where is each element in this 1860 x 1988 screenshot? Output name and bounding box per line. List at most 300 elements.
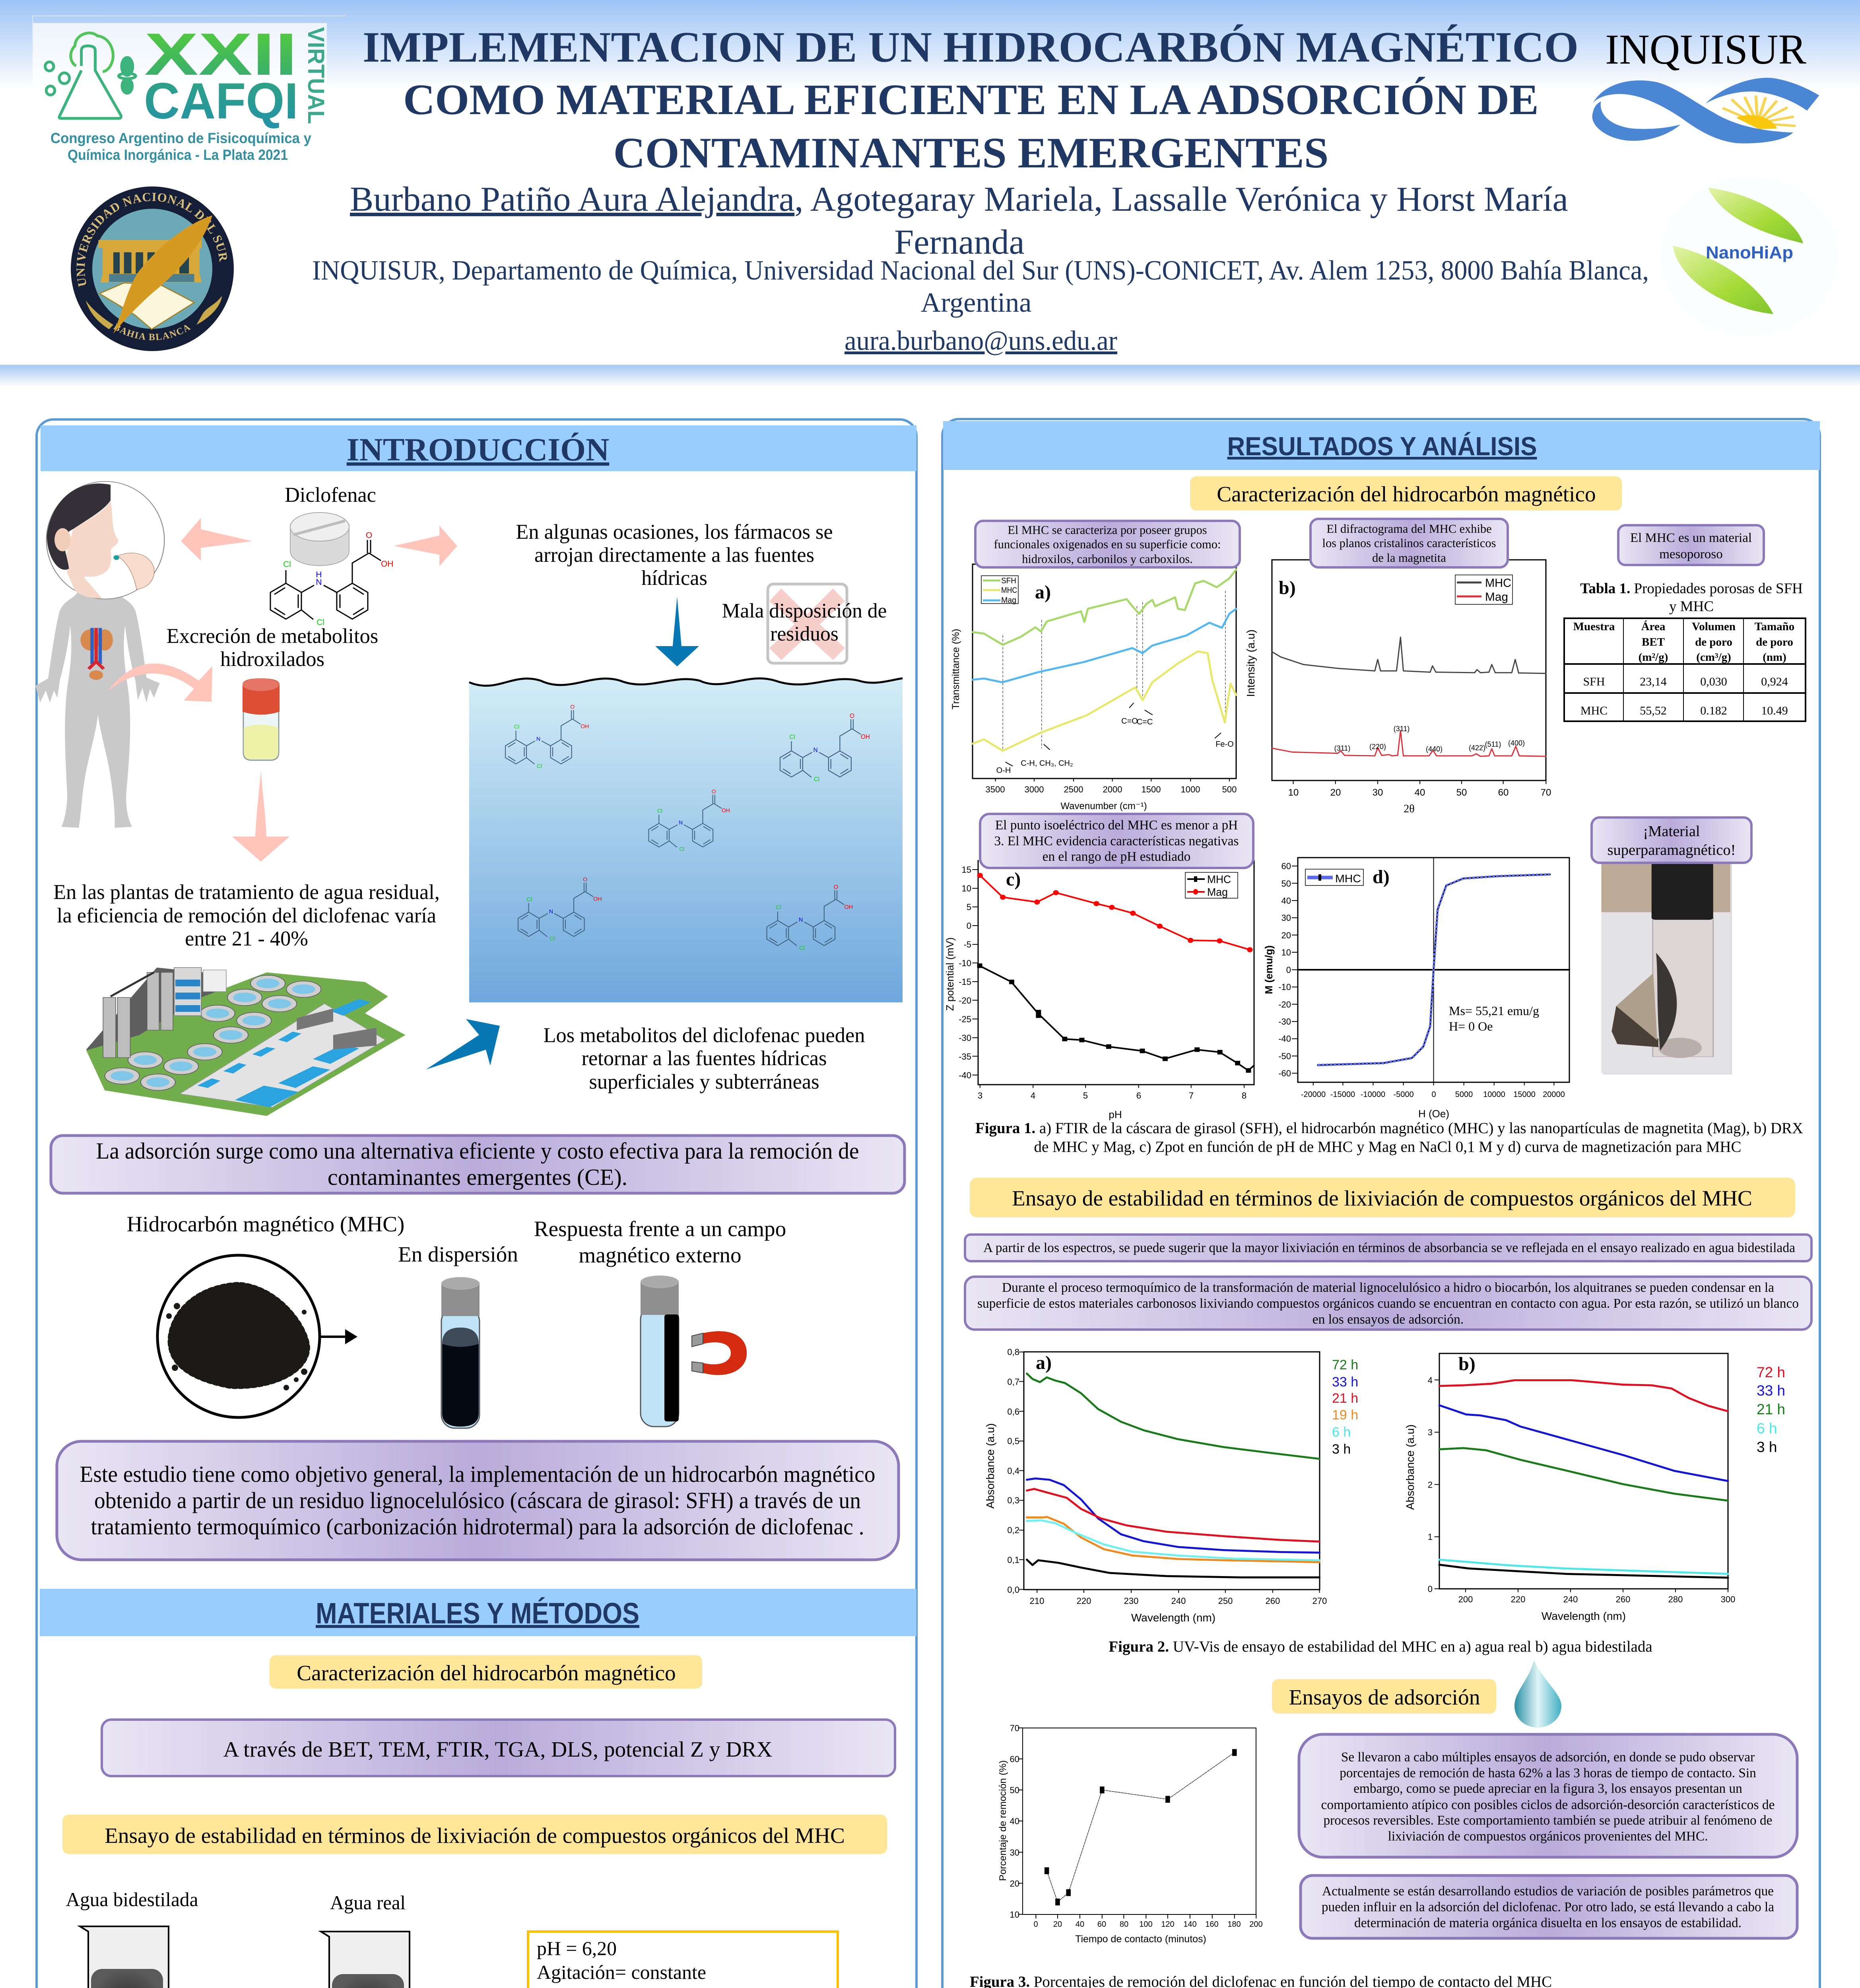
labels: intro text: En algunas ocasiones, los fármacos se <box>516 520 833 544</box>
label: ensayo de estabilidad: Ensayo de estabilidad en términos de lixiviación de compuestos orgánicos del MHC <box>1012 1186 1752 1210</box>
callout: técnicas: A través de BET, TEM, FTIR, TGA, DLS, potencial Z y DRX <box>223 1738 773 1762</box>
chart: UV-Vis agua bidestilada: 0 <box>1428 1584 1433 1594</box>
callout: estudios en desarrollo: Actualmente se están desarrollando estudios de variación de posibles parámetros que <box>1322 1884 1774 1899</box>
callout: técnicas <box>102 1720 895 1776</box>
chart: FTIR: Wavenumber (cm⁻¹) <box>1060 801 1147 812</box>
chart: magnetization curve: 60 <box>1281 861 1291 871</box>
chart: DRX: 10 <box>1288 787 1299 798</box>
chart: Z potential: -30 <box>959 1033 971 1043</box>
chart: UV-Vis agua real: 230 <box>1124 1596 1138 1606</box>
table: propiedades porosas: 0,030 <box>1700 675 1727 688</box>
callout: DRX: de la magnetita <box>1372 551 1446 565</box>
chart: magnetization curve: -15000 <box>1330 1090 1355 1099</box>
legend: DRX: Mag <box>1485 590 1508 604</box>
legend: UV-Vis agua bidestilada: 72 h <box>1757 1364 1785 1380</box>
labels: MHC figure: Hidrocarbón magnético (MHC) <box>127 1212 404 1236</box>
chart: UV-Vis agua bidestilada: Absorbance (a.u) <box>1404 1425 1416 1510</box>
label: caracterización: Caracterización del hidrocarbón magnético <box>297 1661 676 1685</box>
box: condiciones estabilidad: Agitación= constante <box>537 1961 706 1983</box>
logo: Universidad Nacional del Sur seal <box>71 186 234 351</box>
table: propiedades porosas: Volumen <box>1692 620 1736 633</box>
chart: DRX: (400) <box>1508 739 1525 747</box>
chart: magnetization curve: H (Oe) <box>1418 1108 1449 1120</box>
chart: Z potential: -10 <box>959 958 971 968</box>
chart: FTIR: 3000 <box>1025 784 1044 794</box>
chart: magnetization curve: 50 <box>1281 879 1291 889</box>
chart: DRX <box>1245 560 1551 815</box>
callout: objetivo: obtenido a partir de un residuo lignocelulósico (cáscara de girasol: SFH) a través de un <box>94 1487 861 1513</box>
illustration: wastewater treatment plant <box>86 967 406 1116</box>
chart: magnetization curve: -60 <box>1278 1068 1291 1078</box>
molecule in water 2 <box>780 712 870 783</box>
label: ensayo de estabilidad: Ensayo de estabilidad en términos de lixiviación de compuestos orgánicos del MHC <box>105 1823 845 1848</box>
molecule in water 1 <box>505 704 589 770</box>
label: caracterización: Caracterización del hidrocarbón magnético <box>1217 482 1596 506</box>
chart: FTIR: C-H, CH₃, CH₂ <box>1021 759 1073 768</box>
icon: crossed-out waste disposal: residuos <box>770 623 839 645</box>
labels: intro text: superficiales y subterráneas <box>589 1070 819 1093</box>
legend: UV-Vis agua bidestilada: 6 h <box>1757 1420 1777 1437</box>
chart: FTIR: a) <box>1035 582 1051 603</box>
label: agua real: Agua real <box>330 1891 406 1914</box>
chart: DRX: (511) <box>1485 740 1501 748</box>
molecule in water 4: Cl <box>527 896 532 903</box>
chart: magnetization curve: 20 <box>1281 930 1291 940</box>
molecule in water 1: O <box>570 704 575 711</box>
heading bar: resultados y análisis <box>943 421 1820 470</box>
chart: Z potential: -20 <box>959 996 971 1006</box>
legend: UV-Vis agua real: 72 h <box>1332 1357 1358 1373</box>
chart: DRX: 60 <box>1498 787 1509 798</box>
chart: Z potential: Z potential (mV) <box>944 938 956 1011</box>
table: propiedades porosas: de poro <box>1695 636 1732 648</box>
callout: ensayos de adsorción texto: comportamiento atípico con posibles ciclos de adsorción-desorción característicos de <box>1321 1798 1775 1812</box>
molecule in water 5: OH <box>844 904 853 911</box>
chart: magnetization curve: 20000 <box>1543 1090 1565 1099</box>
molecule in water 1: Cl <box>514 724 519 730</box>
chart: UV-Vis agua real: a) <box>1036 1352 1052 1373</box>
icon: pill <box>290 513 349 565</box>
chart: remoción vs tiempo: 80 <box>1120 1920 1128 1929</box>
box: condiciones estabilidad <box>528 1932 838 1988</box>
chart: UV-Vis agua real: 260 <box>1266 1596 1280 1606</box>
labels: intro text: Diclofenac <box>285 483 376 507</box>
chart: remoción vs tiempo: 30 <box>1010 1848 1019 1858</box>
title: COMO MATERIAL EFICIENTE EN LA ADSORCIÓN DE <box>403 76 1539 124</box>
chart: remoción vs tiempo: Porcentaje de remoción (%) <box>998 1760 1008 1881</box>
chart: Z potential: 10 <box>962 883 971 893</box>
table: propiedades porosas: 0,924 <box>1761 675 1788 688</box>
icon: urine vial <box>243 678 280 760</box>
table: propiedades porosas: (cm³/g) <box>1696 651 1731 664</box>
chart: FTIR: C=C <box>1137 718 1153 726</box>
labels: intro text: retornar a las fuentes hídricas <box>582 1047 827 1070</box>
table: propiedades porosas: y MHC <box>1669 598 1714 615</box>
panel: right column <box>941 419 1820 1988</box>
molecule in water 5: O <box>833 884 838 890</box>
logo: CAFQI: VIRTUAL <box>303 27 329 124</box>
table: propiedades porosas: BET <box>1642 636 1665 648</box>
molecule in water 4 <box>518 877 602 942</box>
molecule in water 2: Cl <box>789 734 795 741</box>
chart: FTIR: 1500 <box>1142 784 1161 794</box>
icon: human body and head <box>35 481 164 828</box>
labels: intro text: hídricas <box>641 567 707 590</box>
molecule in water 2: N <box>813 747 818 753</box>
legend: UV-Vis agua real <box>1332 1357 1358 1457</box>
callout: ensayos de adsorción texto: Se llevaron a cabo múltiples ensayos de adsorción, en donde se pudo observar <box>1341 1750 1755 1765</box>
box: condiciones estabilidad: pH = 6,20 <box>537 1937 617 1959</box>
legend: UV-Vis agua real: 21 h <box>1332 1391 1358 1406</box>
table: propiedades porosas: Área <box>1641 620 1666 633</box>
icon: MHC powder <box>157 1255 357 1417</box>
panel: left column <box>35 419 916 1988</box>
chart: magnetization curve: -10 <box>1278 982 1291 992</box>
chart: magnetization curve: -50 <box>1278 1051 1291 1061</box>
icon: crossed-out waste disposal: Mala disposición de <box>722 600 887 622</box>
chart: FTIR: Transmittance (%) <box>950 629 961 710</box>
legend: UV-Vis agua bidestilada: 33 h <box>1757 1382 1785 1399</box>
chart: DRX: (422) <box>1469 744 1485 752</box>
labels: intro text: hidroxilados <box>220 648 324 671</box>
chart: magnetization curve: -5000 <box>1393 1090 1414 1099</box>
legend: FTIR: Mag <box>1001 596 1016 605</box>
callout: ensayos de adsorción texto: lixiviación de compuestos orgánicos provenientes del MHC. <box>1388 1829 1708 1844</box>
authors <box>350 180 1568 262</box>
chart: DRX: 40 <box>1415 787 1425 798</box>
chart: Z potential: -35 <box>959 1052 971 1062</box>
chart: magnetization curve: -20000 <box>1301 1090 1326 1099</box>
callout: espectros: A partir de los espectros, se puede sugerir que la mayor lixiviación en términos de absorbancia se ve reflejada en el ensayo realizado en agua bidestilada <box>983 1241 1795 1255</box>
chart: DRX: 50 <box>1456 787 1467 798</box>
label: caracterización <box>270 1655 702 1689</box>
chart: DRX: (311) <box>1394 725 1410 733</box>
chart: magnetization curve: d) <box>1373 866 1390 887</box>
chart: remoción vs tiempo: 40 <box>1010 1816 1019 1826</box>
chart: Z potential: 3 <box>978 1091 982 1101</box>
callout: ensayos de adsorción texto: procesos reversibles. Este comportamiento también se puede atribuir al fenómeno de <box>1324 1813 1772 1828</box>
logo: CAFQI: Química Inorgánica - La Plata 2021 <box>68 147 288 163</box>
callout: mesoporoso <box>1618 525 1764 565</box>
callout: objetivo: Este estudio tiene como objetivo general, la implementación de un hidrocarbón magnético <box>80 1461 876 1487</box>
logo: CAFQI <box>33 16 346 166</box>
callout: FTIR: hidroxilos, carbonilos y carboxilos. <box>1022 552 1193 566</box>
caption: figura 1 <box>975 1120 1803 1155</box>
chart: FTIR: 500 <box>1222 784 1237 794</box>
callout: ensayos de adsorción texto: porcentajes de remoción de hasta 62% a las 3 horas de tiempo de contacto. Sin <box>1340 1766 1756 1780</box>
labels: intro text: entre 21 - 40% <box>185 927 308 950</box>
chart: remoción vs tiempo: 40 <box>1076 1920 1084 1929</box>
callout: FTIR: funcionales oxigenados en su superficie como: <box>994 538 1221 551</box>
chart: UV-Vis agua bidestilada: 300 <box>1721 1594 1735 1604</box>
molecule in water 4: O <box>583 877 587 883</box>
chart: FTIR: 2500 <box>1064 784 1083 794</box>
callout: ensayos de adsorción texto <box>1299 1734 1797 1857</box>
legend: UV-Vis agua real: 3 h <box>1332 1442 1351 1457</box>
chart: DRX: 2θ <box>1404 803 1415 815</box>
callout: estudios en desarrollo: determinación de materia orgánica disuelta en los ensayos de estabilidad. <box>1354 1916 1742 1930</box>
affiliation: INQUISUR, Departamento de Química, Universidad Nacional del Sur (UNS)-CONICET, Av. Alem 1253, 8000 Bahía Blanca, <box>312 255 1649 286</box>
molecule in water 4: Cl <box>549 936 555 942</box>
callout: estudios en desarrollo: pueden influir en la adsorción del diclofenac. Por otro lado, se está llevando a cabo la <box>1322 1900 1774 1914</box>
callout: objetivo: tratamiento termoquímico (carbonización hidrotermal) para la adsorción de diclofenac . <box>91 1514 864 1540</box>
chart: UV-Vis agua bidestilada: Wavelength (nm) <box>1542 1610 1626 1622</box>
labels: MHC figure: En dispersión <box>398 1242 518 1266</box>
label: ensayos de adsorción <box>1272 1679 1496 1714</box>
chart: magnetization curve: -40 <box>1278 1034 1291 1044</box>
chart: UV-Vis agua bidestilada: 1 <box>1428 1532 1433 1542</box>
legend: magnetization: MHC <box>1335 872 1361 885</box>
heading bar: introducción <box>41 425 916 471</box>
table: propiedades porosas: (m²/g) <box>1639 651 1668 664</box>
chart: magnetization curve: 0 <box>1431 1090 1436 1099</box>
label: ensayo de estabilidad <box>970 1178 1795 1217</box>
chart: UV-Vis agua real: 0,3 <box>1007 1495 1019 1505</box>
photo: vial with magnet <box>1601 863 1732 1074</box>
molecule in water 3: N <box>679 819 683 826</box>
chart: UV-Vis agua bidestilada: 3 <box>1428 1427 1433 1437</box>
chart: UV-Vis agua real: 0,7 <box>1007 1377 1019 1387</box>
chart: UV-Vis agua real: 0,1 <box>1007 1555 1019 1565</box>
legend: DRX <box>1455 575 1512 604</box>
chart: remoción vs tiempo: 160 <box>1205 1920 1219 1929</box>
arrow: blue diagonal <box>426 1019 500 1070</box>
chart: UV-Vis agua real: 270 <box>1312 1596 1327 1606</box>
callout: adsorción: contaminantes emergentes (CE). <box>328 1164 627 1190</box>
chart: magnetization curve: -20 <box>1278 1000 1291 1010</box>
molecule in water 5 <box>767 884 853 951</box>
molecule: diclofenac: O <box>366 531 372 540</box>
table: propiedades porosas: Tamaño <box>1755 620 1794 633</box>
caption: figura 2: Figura 2. UV-Vis de ensayo de estabilidad del MHC en a) agua real b) agua bidestilada <box>1109 1638 1652 1655</box>
chart: Z potential: -40 <box>959 1070 971 1080</box>
molecule in water 2: Cl <box>814 776 819 783</box>
chart: Z potential: -15 <box>959 977 971 987</box>
chart: UV-Vis agua bidestilada: 240 <box>1563 1594 1578 1604</box>
callout: DRX: los planos cristalinos característicos <box>1322 536 1496 550</box>
chart: magnetization curve: Ms= 55,21 emu/g <box>1449 1004 1539 1018</box>
chart: magnetization curve <box>1263 858 1569 1120</box>
chart: UV-Vis agua bidestilada: 220 <box>1511 1594 1525 1604</box>
molecule in water 2: OH <box>861 734 870 740</box>
chart: DRX: (440) <box>1426 745 1443 753</box>
table: propiedades porosas: Tabla 1. Propiedades porosas de SFH <box>1580 580 1803 597</box>
legend: UV-Vis agua bidestilada <box>1757 1364 1785 1455</box>
chart: FTIR <box>950 564 1237 812</box>
chart: FTIR: C=O <box>1121 717 1138 726</box>
authors: Burbano Patiño Aura Alejandra, Agotegaray Mariela, Lassalle Verónica y Horst María <box>350 180 1568 219</box>
legend: FTIR: MHC <box>1001 586 1017 595</box>
logo: CAFQI: XXII <box>144 21 297 87</box>
chart: UV-Vis agua real: 0,4 <box>1007 1466 1019 1476</box>
callout: adsorción: La adsorción surge como una alternativa eficiente y costo efectiva para la remoción de <box>96 1138 859 1164</box>
callout: DRX: El difractograma del MHC exhibe <box>1326 522 1492 536</box>
callout: FTIR: El MHC se caracteriza por poseer grupos <box>1008 523 1207 537</box>
illustration: water body with diclofenac <box>469 678 903 1002</box>
legend: FTIR <box>981 576 1018 605</box>
icon: stirrer agua real <box>307 1932 525 1988</box>
chart: UV-Vis agua real: Wavelength (nm) <box>1131 1611 1215 1624</box>
chart: remoción vs tiempo: 60 <box>1010 1754 1019 1764</box>
icon: stirrer agua bidestilada <box>66 1926 284 1988</box>
chart: remoción vs tiempo: 140 <box>1183 1920 1197 1929</box>
labels: MHC figure: Respuesta frente a un campo <box>534 1217 786 1241</box>
heading bar: materiales y métodos: MATERIALES Y MÉTODOS <box>316 1597 639 1630</box>
callout: adsorción <box>51 1136 905 1193</box>
chart: UV-Vis agua bidestilada: 4 <box>1428 1375 1433 1385</box>
chart: Z potential: c) <box>1006 869 1021 890</box>
table: propiedades porosas: 0.182 <box>1700 704 1727 717</box>
chart: FTIR: O-H <box>996 766 1011 775</box>
molecule: diclofenac: N <box>316 578 322 587</box>
callout: proceso termoquímico: superficie de estos materiales carbonosos lixiviando compuestos orgánicos cuando se encuentran en contacto con agua. Por esta razón, se utilizó un blanco <box>977 1296 1799 1311</box>
heading bar: materiales y métodos <box>40 1589 916 1636</box>
callout: FTIR <box>975 521 1240 567</box>
chart: Z potential: 5 <box>1083 1091 1088 1101</box>
authors: Fernanda <box>894 223 1025 262</box>
molecule: diclofenac: OH <box>381 559 394 569</box>
legend: magnetization <box>1305 869 1363 885</box>
callout: superparamagnético <box>1592 817 1751 863</box>
callout: superparamagnético: superparamagnético! <box>1608 842 1736 858</box>
logo: Universidad Nacional del Sur seal: UNIVERSIDAD NACIONAL DEL SUR <box>74 190 231 288</box>
table: propiedades porosas: 23,14 <box>1640 675 1667 688</box>
callout: punto isoeléctrico: El punto isoeléctrico del MHC es menor a pH <box>995 818 1238 833</box>
labels: intro text: la eficiencia de remoción del diclofenac varía <box>57 904 436 927</box>
chart: UV-Vis agua bidestilada <box>1404 1353 1785 1622</box>
title: IMPLEMENTACION DE UN HIDROCARBÓN MAGNÉTICO <box>363 23 1578 71</box>
legend: Z potential <box>1185 872 1238 898</box>
callout: punto isoeléctrico: 3. El MHC evidencia características negativas <box>994 834 1239 848</box>
legend: Z potential: Mag <box>1207 886 1228 898</box>
chart: Z potential: 6 <box>1136 1091 1141 1101</box>
molecule in water 1: OH <box>581 724 589 730</box>
logo: Universidad Nacional del Sur seal: BAHIA BLANCA <box>112 322 193 343</box>
logo: CAFQI: Congreso Argentino de Fisicoquímica y <box>50 130 311 146</box>
chart: DRX: 70 <box>1541 787 1551 798</box>
callout: mesoporoso: El MHC es un material <box>1630 531 1752 545</box>
chart: DRX: b) <box>1279 577 1296 598</box>
chart: remoción vs tiempo: 70 <box>1010 1723 1019 1733</box>
molecule: diclofenac: H <box>316 570 322 579</box>
logo: CAFQI: CAFQI <box>144 73 298 130</box>
callout: superparamagnético: ¡Material <box>1643 823 1700 840</box>
chart: magnetization curve: 0 <box>1286 965 1291 975</box>
icon: tube in dispersion <box>441 1277 480 1428</box>
chart: Z potential: 8 <box>1242 1091 1246 1101</box>
callout: espectros <box>965 1235 1811 1261</box>
chart: Z potential: 0 <box>967 921 971 931</box>
molecule in water 2: O <box>850 712 854 719</box>
heading bar: resultados y análisis: RESULTADOS Y ANÁLISIS <box>1227 431 1537 461</box>
chart: remoción vs tiempo: 10 <box>1010 1910 1019 1920</box>
arrow: pink down from vial <box>232 771 289 862</box>
chart: magnetization curve: 5000 <box>1455 1090 1473 1099</box>
molecule in water 3: Cl <box>679 846 684 852</box>
chart: UV-Vis agua real: 210 <box>1030 1596 1044 1606</box>
chart: Z potential: 7 <box>1189 1091 1194 1101</box>
chart: UV-Vis agua real: Absorbance (a.u) <box>984 1423 996 1508</box>
chart: DRX: 20 <box>1330 787 1341 798</box>
chart: remoción vs tiempo: 20 <box>1010 1879 1019 1889</box>
labels: intro text: arrojan directamente a las fuentes <box>534 544 814 567</box>
table: propiedades porosas: (nm) <box>1763 651 1786 664</box>
chart: magnetization curve: M (emu/g) <box>1263 945 1275 994</box>
chart: UV-Vis agua real: 250 <box>1218 1596 1233 1606</box>
callout: mesoporoso: mesoporoso <box>1659 547 1723 561</box>
title <box>363 23 1578 177</box>
table: propiedades porosas: Muestra <box>1573 620 1615 633</box>
molecule in water 5: Cl <box>776 905 781 911</box>
chart: UV-Vis agua real: 220 <box>1077 1596 1091 1606</box>
callout: punto isoeléctrico: en el rango de pH estudiado <box>1043 849 1190 864</box>
legend: UV-Vis agua real: 6 h <box>1332 1425 1351 1440</box>
chart: magnetization curve: -30 <box>1278 1017 1291 1027</box>
legend: UV-Vis agua bidestilada: 3 h <box>1757 1439 1777 1455</box>
chart: UV-Vis agua real: 240 <box>1171 1596 1186 1606</box>
chart: remoción vs tiempo <box>998 1723 1263 1945</box>
chart: magnetization curve: 10000 <box>1483 1090 1505 1099</box>
email: aura.burbano@uns.edu.ar <box>845 326 1117 356</box>
chart: remoción vs tiempo: 100 <box>1139 1920 1153 1929</box>
chart: magnetization curve: 15000 <box>1513 1090 1536 1099</box>
molecule in water 4: N <box>549 909 553 915</box>
arrow: blue down to water <box>655 596 699 666</box>
icon: water drop <box>1514 1660 1561 1728</box>
labels: MHC figure: magnético externo <box>579 1243 742 1267</box>
chart: UV-Vis agua bidestilada: 2 <box>1428 1480 1433 1490</box>
chart: remoción vs tiempo: 20 <box>1053 1920 1062 1929</box>
molecule: diclofenac <box>270 531 394 627</box>
chart: UV-Vis agua bidestilada: 260 <box>1616 1594 1630 1604</box>
labels: intro text: En las plantas de tratamiento de agua residual, <box>53 881 440 904</box>
table: propiedades porosas: SFH <box>1583 675 1605 688</box>
table: propiedades porosas <box>1564 580 1806 721</box>
chart: Z potential: pH <box>1109 1109 1122 1120</box>
table: propiedades porosas: 55,52 <box>1640 704 1667 717</box>
logo: INQUISUR <box>1592 26 1819 144</box>
chart: UV-Vis agua bidestilada: b) <box>1458 1353 1476 1375</box>
molecule in water 3: OH <box>722 807 730 813</box>
chart: remoción vs tiempo: 120 <box>1161 1920 1175 1929</box>
chart: remoción vs tiempo: 0 <box>1033 1920 1038 1929</box>
chart: DRX: (220) <box>1369 743 1386 751</box>
callout: estudios en desarrollo <box>1301 1875 1797 1938</box>
labels: intro text: Excreción de metabolitos <box>167 625 378 648</box>
chart: FTIR: 2000 <box>1103 784 1122 794</box>
chart: UV-Vis agua real: 0,8 <box>1007 1347 1019 1357</box>
chart: remoción vs tiempo: 180 <box>1227 1920 1241 1929</box>
molecule in water 3: O <box>712 788 716 795</box>
chart: magnetization curve: 30 <box>1281 913 1291 923</box>
chart: DRX: (311) <box>1334 744 1350 752</box>
heading bar: introducción: INTRODUCCIÓN <box>347 431 609 468</box>
chart: UV-Vis agua real: 0,0 <box>1007 1585 1019 1595</box>
logo: NanoHiAp: NanoHiAp <box>1706 243 1793 262</box>
legend: Z potential: MHC <box>1207 873 1231 885</box>
chart: Z potential: 5 <box>967 902 971 912</box>
legend: UV-Vis agua bidestilada: 21 h <box>1757 1401 1785 1417</box>
chart: magnetization curve: H= 0 Oe <box>1449 1019 1493 1033</box>
chart: remoción vs tiempo: 60 <box>1097 1920 1106 1929</box>
chart: FTIR: 1000 <box>1181 784 1200 794</box>
label: ensayo de estabilidad <box>62 1815 887 1854</box>
arrow: pink curve from body to vial <box>107 664 212 702</box>
chart: magnetization curve: 40 <box>1281 896 1291 906</box>
icon: tube with magnet <box>641 1276 747 1427</box>
chart: magnetization curve: 10 <box>1281 947 1291 957</box>
molecule in water 3: Cl <box>657 808 662 814</box>
